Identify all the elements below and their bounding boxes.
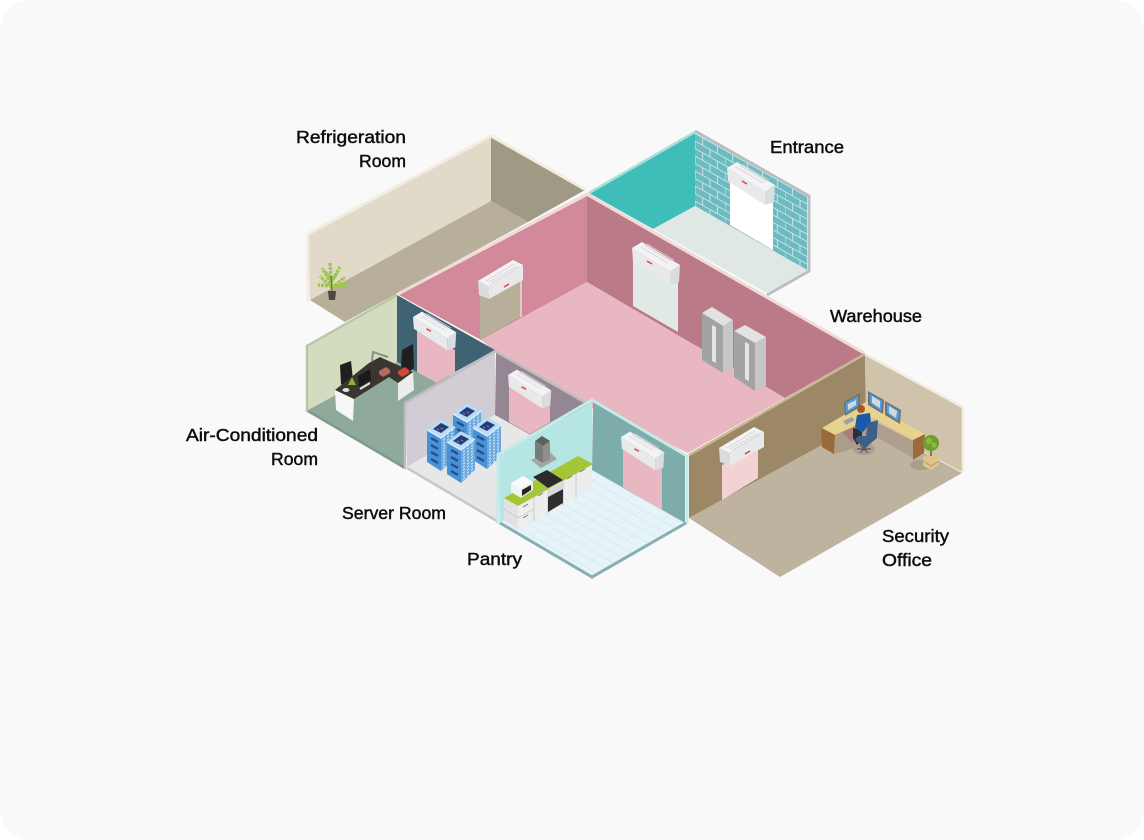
refrigeration left wall [309, 137, 491, 300]
desk right leg [913, 434, 925, 460]
chair back [855, 420, 878, 448]
person trousers [853, 428, 862, 445]
desk books red [398, 367, 409, 377]
label: warehouse: Warehouse [830, 306, 922, 326]
label: security office: Office [882, 550, 932, 570]
door: pantry [623, 445, 662, 510]
server racks [427, 403, 501, 483]
security left wall edge [689, 354, 865, 455]
door edge: refrigeration [520, 278, 522, 317]
air conditioner: warehouse right [632, 242, 680, 285]
desk left leg [821, 428, 835, 454]
cabinet: first panel [702, 307, 733, 373]
entrance brick wall [695, 133, 807, 270]
monitor one [844, 393, 860, 416]
security left wall [689, 355, 866, 518]
pantry wall edges [498, 400, 687, 524]
label: refrigeration room: Room [359, 151, 406, 171]
warehouse wall edge [398, 194, 864, 353]
microwave [511, 476, 533, 498]
monitor three [885, 401, 901, 424]
air conditioner: server room [508, 370, 551, 408]
warehouse left wall [399, 196, 587, 340]
desk dish [342, 388, 350, 392]
label: security office [882, 526, 949, 570]
under desk shade right [878, 423, 913, 458]
security floor [689, 421, 962, 577]
warehouse floor [481, 282, 785, 453]
desk plant [348, 377, 356, 385]
panel: refrigeration room [308, 136, 586, 322]
pantry tiled floor [500, 470, 685, 577]
keyboard [843, 417, 855, 425]
label: air-conditioned room [186, 425, 318, 469]
pantry left wall [499, 402, 592, 523]
desk left leg [335, 390, 354, 421]
server room back wall [495, 352, 590, 435]
air-conditioned back wall [397, 295, 495, 383]
carpet accent [842, 424, 860, 442]
air-conditioned left wall [308, 296, 397, 410]
label: air-conditioned room: Air-Conditioned [186, 425, 318, 445]
air conditioner: air-conditioned room [413, 312, 456, 350]
person torso [855, 413, 871, 433]
stove top [533, 470, 563, 488]
server rack back [453, 403, 481, 455]
door: server room [509, 385, 550, 434]
chair back right [401, 344, 414, 373]
pantry floor edge [500, 523, 686, 577]
security outer edge [865, 354, 963, 473]
label: security office: Security [882, 526, 949, 546]
desk top [822, 402, 925, 440]
warehouse right wall [587, 196, 863, 398]
oven panel [548, 482, 563, 497]
counter side [504, 498, 518, 530]
counter top [504, 456, 593, 506]
security right wall [865, 355, 962, 472]
server rack right [473, 417, 501, 469]
air-conditioned floor edge [308, 411, 405, 468]
entrance floor [653, 206, 807, 293]
counter front [518, 465, 592, 530]
counter cabinet lines [504, 474, 576, 522]
air conditioner: security office [719, 427, 764, 466]
air conditioner: pantry [621, 432, 664, 470]
cabinet: second panel [734, 325, 766, 391]
counter handles [523, 469, 585, 518]
panel: server room [405, 351, 590, 521]
desk top [335, 357, 413, 399]
desk lamp [372, 352, 388, 361]
air conditioner: warehouse left [478, 260, 523, 299]
server room edges [405, 351, 588, 469]
under desk shade left [834, 415, 870, 454]
panel: pantry [498, 400, 687, 577]
panel: air-conditioned room [307, 295, 495, 468]
person head [857, 405, 865, 413]
panel: entrance [589, 131, 809, 295]
label: refrigeration room [296, 127, 406, 171]
server room left wall [406, 352, 495, 467]
door: security office [722, 448, 758, 500]
desk books grey [379, 367, 390, 377]
icon: potted shrub [910, 435, 939, 470]
chair base [857, 441, 871, 453]
chair shadow [853, 443, 875, 455]
oven [548, 489, 563, 512]
label: pantry: Pantry [467, 549, 522, 569]
server rack left [427, 419, 455, 471]
air-conditioned wall edge [307, 295, 397, 412]
door: warehouse to entrance [633, 255, 678, 332]
server rack front [447, 431, 475, 483]
air conditioner: entrance [727, 162, 775, 205]
label: server room: Server Room [342, 503, 446, 523]
chair back left [340, 361, 353, 388]
entrance outer edge [695, 131, 809, 295]
monitor two [868, 391, 884, 414]
entrance teal wall [589, 133, 695, 229]
label: air-conditioned room: Room [271, 449, 318, 469]
pantry back wall [592, 402, 685, 523]
desk keyboard [360, 383, 370, 389]
door: air-conditioned room [417, 330, 455, 383]
panel: security office [689, 354, 963, 577]
server room floor [407, 415, 545, 521]
icon: potted plant [318, 263, 348, 300]
door: warehouse to refrigeration [480, 278, 520, 340]
panel: warehouse [398, 194, 864, 453]
cooker hood [531, 436, 557, 468]
air-conditioned floor [308, 362, 438, 467]
server room floor edge [407, 468, 497, 521]
label: refrigeration room: Refrigeration [296, 127, 406, 147]
refrigeration floor [310, 201, 528, 322]
entrance door [730, 180, 773, 250]
labels [186, 127, 949, 570]
refrigeration back wall [491, 137, 585, 222]
kitchen counter [504, 456, 593, 530]
entrance wall edges [589, 132, 695, 193]
label: entrance: Entrance [770, 137, 844, 157]
security desk [821, 391, 925, 460]
desk monitor [358, 369, 371, 387]
refrigeration wall edge [308, 136, 586, 301]
desk right leg [398, 372, 414, 401]
reception desk [335, 344, 414, 421]
